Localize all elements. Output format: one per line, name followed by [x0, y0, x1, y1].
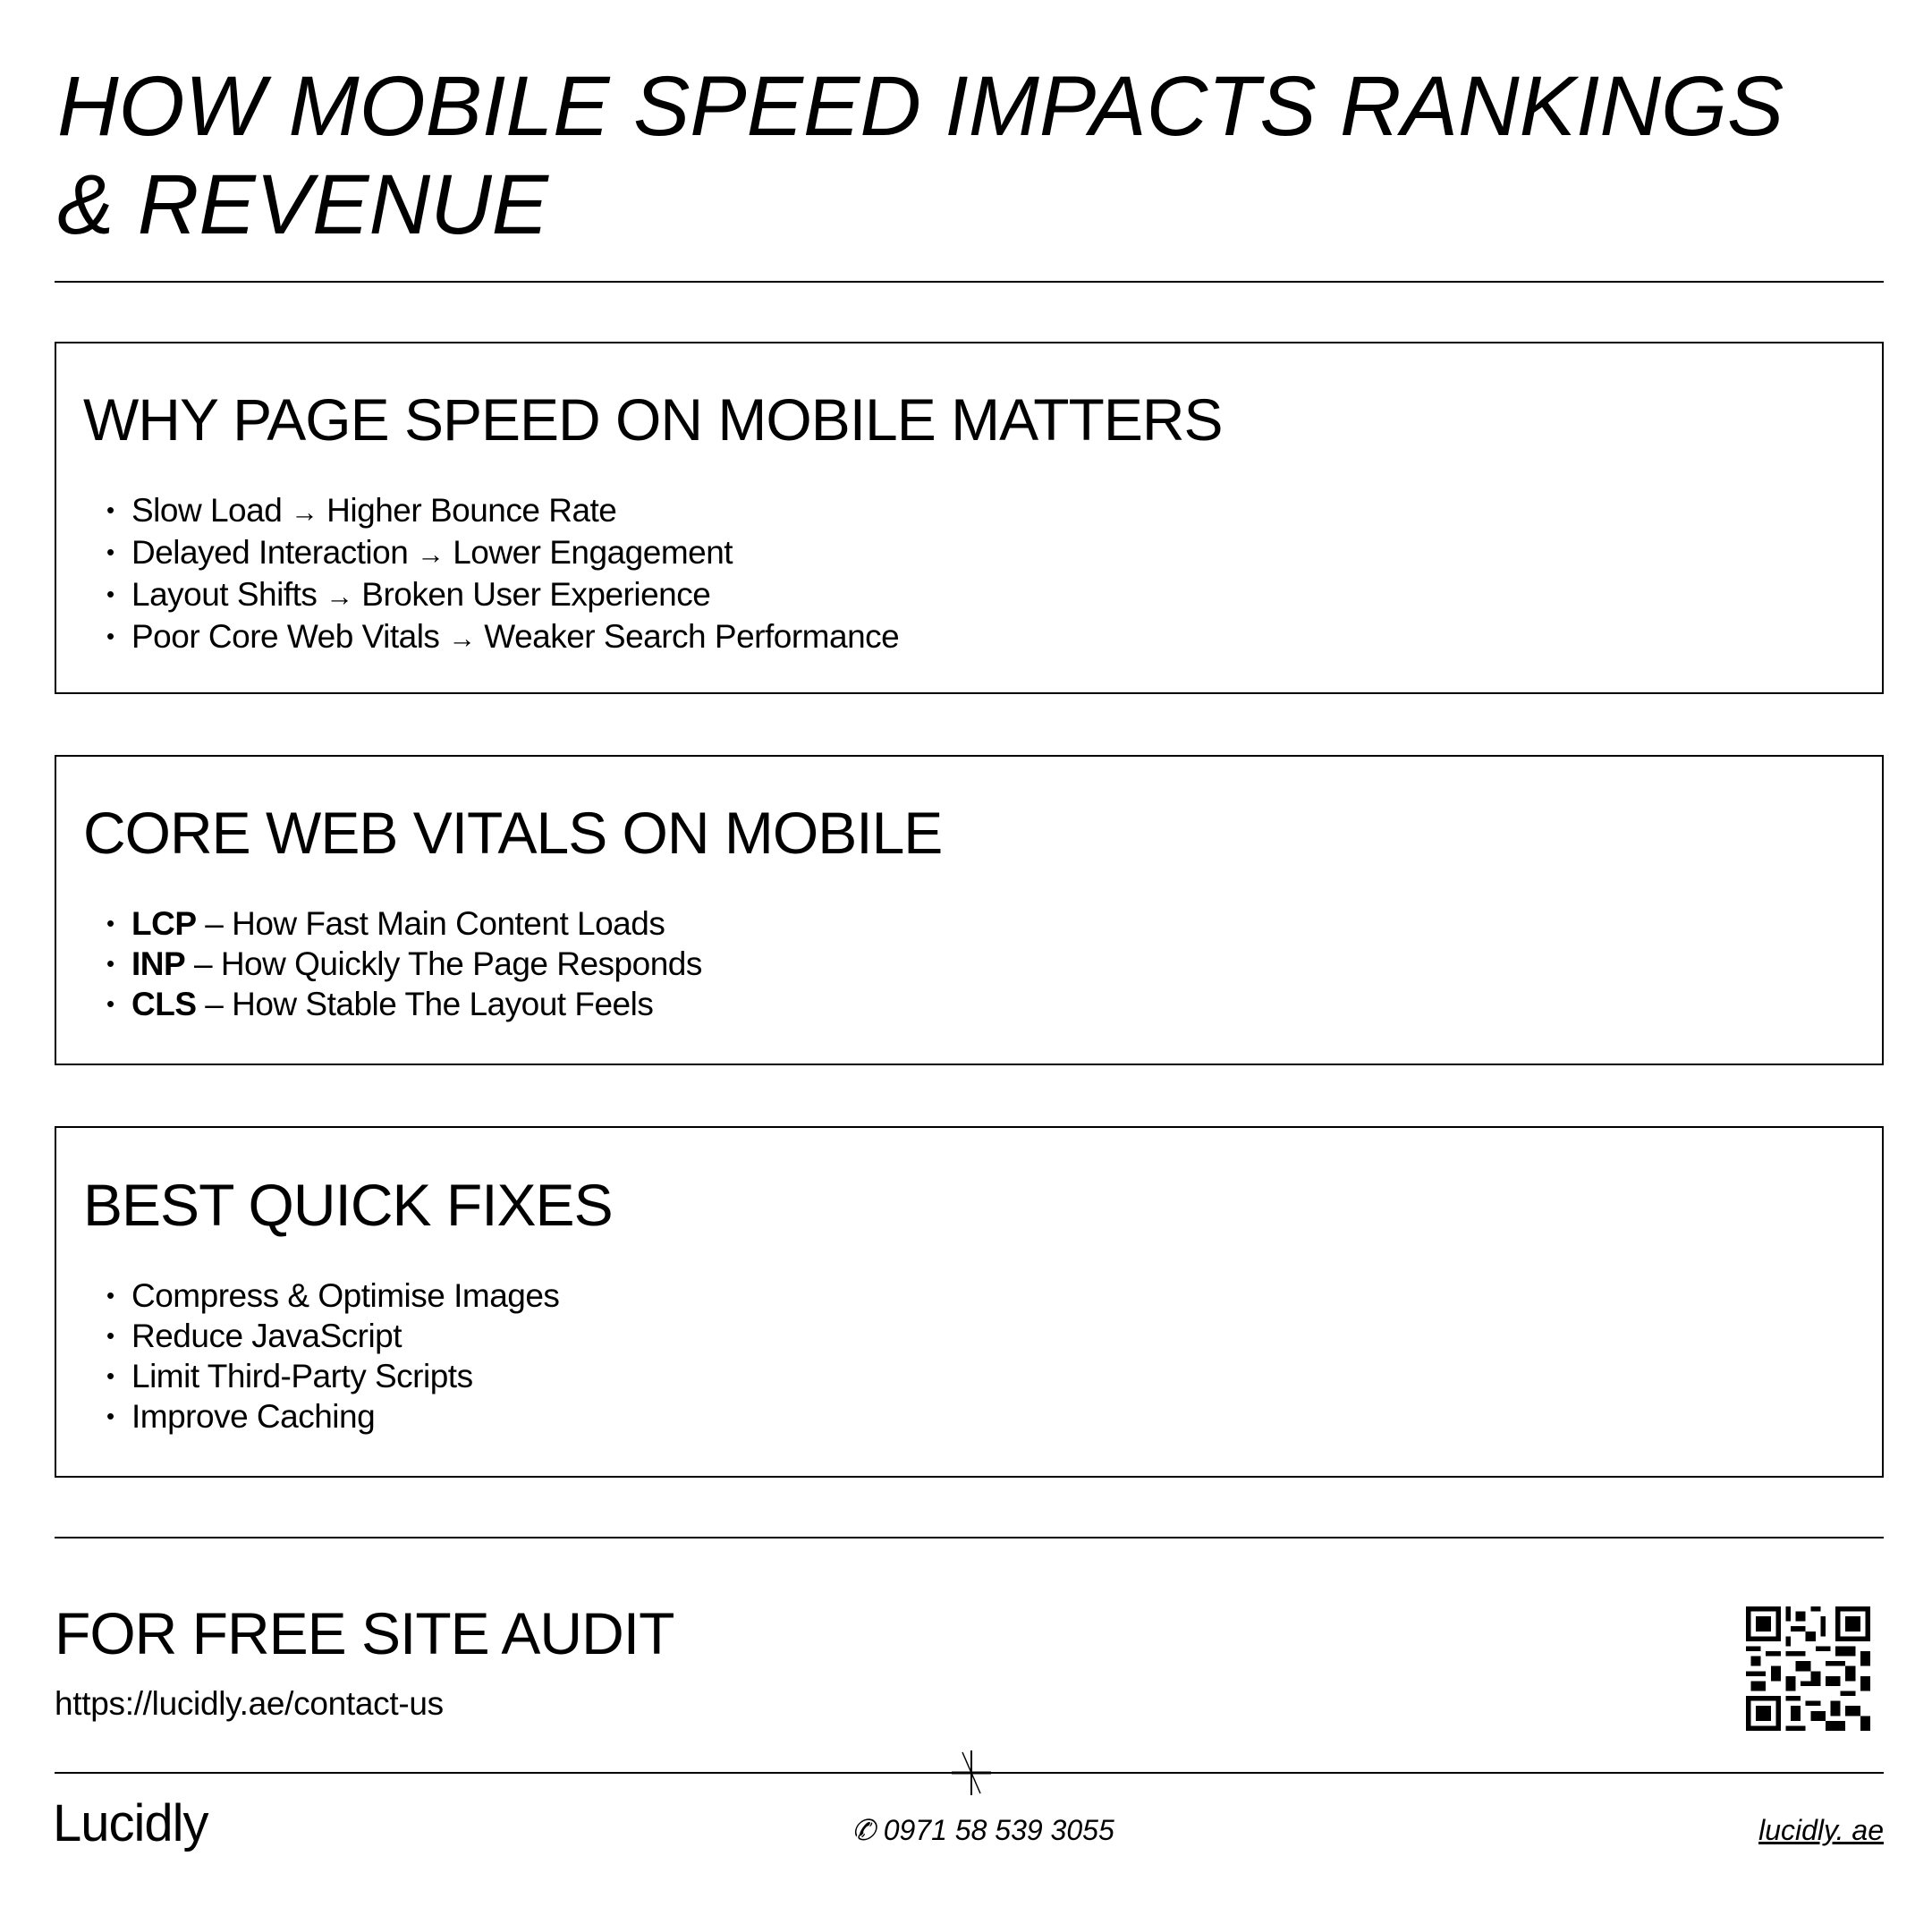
list: quick fixes: Improve Caching — [131, 1398, 375, 1435]
list: why page speed: Delayed Interaction → Lower Engagement — [131, 534, 733, 571]
panel: why page speed — [55, 342, 1884, 694]
cta heading: FOR FREE SITE AUDIT — [55, 1600, 674, 1666]
title: & REVENUE — [57, 157, 548, 252]
list: core web vitals — [107, 905, 702, 1022]
icon: qr code — [1746, 1606, 1870, 1731]
list: core web vitals: LCP – How Fast Main Content Loads — [131, 905, 665, 942]
list: quick fixes: Compress & Optimise Images — [131, 1277, 559, 1314]
title — [57, 59, 1784, 252]
list: quick fixes: Reduce JavaScript — [131, 1318, 402, 1354]
panel: quick fixes — [55, 1126, 1884, 1478]
list: core web vitals: INP – How Quickly The Page Responds — [131, 945, 702, 982]
website link: lucidly. ae — [1758, 1814, 1884, 1846]
list: quick fixes: Limit Third-Party Scripts — [131, 1358, 473, 1394]
panel: core web vitals — [55, 755, 1884, 1065]
list: quick fixes — [107, 1277, 559, 1435]
heading: quick fixes: BEST QUICK FIXES — [83, 1172, 613, 1238]
title: HOW MOBILE SPEED IMPACTS RANKINGS — [57, 59, 1784, 154]
heading: core web vitals: CORE WEB VITALS ON MOBILE — [83, 800, 942, 866]
list: core web vitals: CLS – How Stable The Layout Feels — [131, 986, 653, 1022]
icon: star mark — [952, 1750, 991, 1795]
phone: ✆ 0971 58 539 3055 — [852, 1814, 1114, 1846]
logo: Lucidly — [53, 1794, 208, 1852]
list: why page speed: Slow Load → Higher Bounce Rate — [131, 492, 616, 529]
heading: why page speed: WHY PAGE SPEED ON MOBILE MATTERS — [83, 386, 1223, 453]
list: why page speed: Poor Core Web Vitals → Weaker Search Performance — [131, 618, 899, 655]
cta url: https://lucidly.ae/contact-us — [55, 1685, 444, 1722]
list: why page speed — [107, 492, 899, 655]
list: why page speed: Layout Shifts → Broken User Experience — [131, 576, 710, 613]
